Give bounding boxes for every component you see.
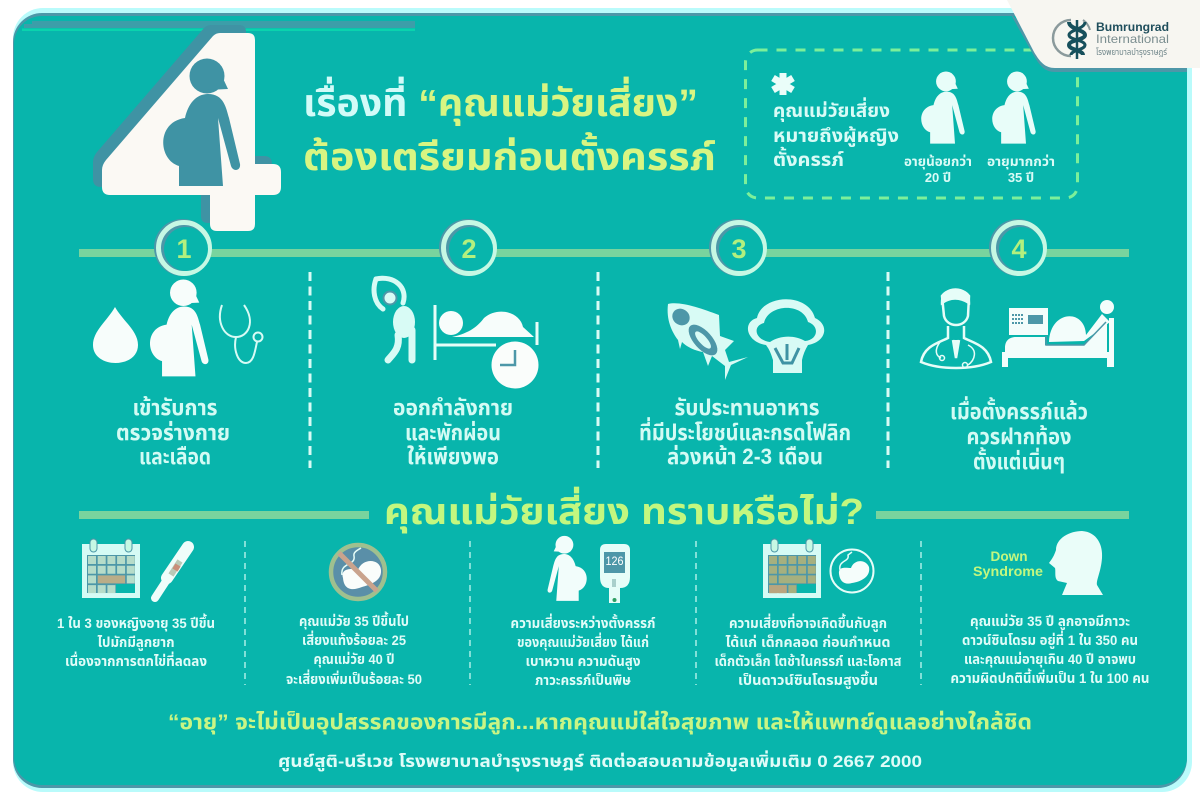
fact 5 text: ความผิดปกตินี้เพิ่มเป็น 1 ใน 100 คน — [950, 668, 1150, 686]
label: over 35: 35 ปี — [1008, 170, 1034, 185]
icon: fish — [668, 303, 748, 380]
fact 5 text: และคุณแม่อายุเกิน 40 ปี อาจพบ — [964, 651, 1136, 668]
icon: pregnant woman — [150, 279, 208, 376]
panel: fact 5 — [950, 531, 1150, 686]
fact 4 text: เป็นดาวน์ซินโดรมสูงขึ้น — [738, 670, 878, 690]
fact 1 text: ไปมักมีลูกยาก — [98, 634, 174, 652]
step 2 badge: 2 — [461, 234, 477, 264]
panel: fact 4 — [714, 539, 902, 690]
fact 3 text: ของคุณแม่วัยเสี่ยง ได้แก่ — [517, 632, 649, 651]
step 4 text: ควรฝากท้อง — [966, 424, 1072, 449]
label: under 20: 20 ปี — [925, 170, 951, 185]
icon: woman over 35 — [992, 72, 1036, 144]
title — [303, 76, 716, 179]
step 3 badge — [709, 219, 766, 276]
step 1 text — [116, 395, 230, 469]
step 2 text — [393, 395, 513, 469]
icon: broccoli — [748, 299, 824, 373]
callout: definition of at-risk mother — [746, 50, 1078, 198]
step 2 text: และพักผ่อน — [405, 420, 501, 445]
fact 2 text — [286, 611, 422, 687]
fact 2 text: เสี่ยงแท้งร้อยละ 25 — [302, 630, 406, 648]
fact 2 text: จะเสี่ยงเพิ่มเป็นร้อยละ 50 — [286, 669, 422, 687]
step 2 badge — [439, 219, 496, 276]
logo tab — [1007, 0, 1200, 72]
icon: glucose meter: 126 — [606, 554, 624, 568]
label: Down Syndrome — [973, 548, 1043, 579]
step 3 text: ล่วงหน้า 2-3 เดือน — [667, 444, 823, 469]
label: under 20 — [904, 154, 972, 185]
icon: woman under 20 — [921, 72, 965, 144]
icon: hospital bed with monitor — [1002, 300, 1114, 367]
step 3 badge: 3 — [731, 234, 747, 264]
fact 3 text: ภาวะครรภ์เป็นพิษ — [535, 672, 631, 688]
icon: glucose meter — [600, 544, 630, 603]
fact 5 text: คุณแม่วัย 35 ปี ลูกอาจมีภาวะ — [970, 613, 1130, 631]
step 2 text: ให้เพียงพอ — [407, 444, 499, 469]
fact 3 text — [510, 613, 656, 688]
icon: bed with sleeper — [435, 305, 537, 360]
label: Down Syndrome: Down — [990, 548, 1028, 564]
logo text: โรงพยาบาลบำรุงราษฎร์ — [1096, 47, 1168, 57]
icon: doctor — [921, 290, 991, 368]
panel: fact 1 — [57, 539, 215, 669]
panel: step 2 — [374, 278, 538, 469]
logo text: International — [1096, 32, 1169, 46]
timeline line — [79, 249, 1129, 257]
fact 5 text: ดาวน์ซินโดรม อยู่ที่ 1 ใน 350 คน — [962, 630, 1138, 650]
step 4 text — [950, 396, 1088, 474]
step 4 badge: 4 — [1011, 234, 1027, 264]
step 1 text: เข้ารับการ — [132, 395, 218, 420]
step 1 badge — [154, 219, 211, 276]
fact 1 text: 1 ใน 3 ของหญิงอายุ 35 ปีขึ้น — [57, 613, 215, 632]
step 1 text: และเลือด — [139, 444, 211, 469]
icon: pregnancy test — [155, 547, 188, 598]
definition text: หมายถึงผู้หญิง — [773, 125, 899, 147]
label: under 20: อายุน้อยกว่า — [904, 154, 972, 169]
logo text: Bumrungrad — [1096, 20, 1169, 34]
fact 4 text — [714, 613, 902, 690]
contact line: ศูนย์สูติ-นรีเวช โรงพยาบาลบำรุงราษฎร์ ติดต่อสอบถามข้อมูลเพิ่มเติม 0 2667 2000 — [278, 750, 922, 772]
icon: pregnant woman silhouette — [163, 58, 240, 186]
icon: logo emblem — [1053, 20, 1090, 59]
panel: fact 3 — [510, 536, 656, 688]
fact 2 text: คุณแม่วัย 35 ปีขึ้นไป — [299, 611, 409, 630]
definition text: ตั้งครรภ์ — [773, 147, 844, 171]
label: over 35 — [987, 154, 1055, 185]
logo text — [1096, 20, 1169, 57]
label: Down Syndrome: Syndrome — [973, 563, 1043, 579]
step 4 text: เมื่อตั้งครรภ์แล้ว — [950, 396, 1088, 424]
fact 5 text — [950, 613, 1150, 686]
icon: stethoscope — [220, 305, 262, 363]
icon: no-fetus symbol — [330, 544, 386, 600]
step 3 text — [639, 395, 851, 469]
icon: calendar — [763, 539, 821, 598]
icon: blood drop — [93, 307, 138, 363]
fact 1 text — [57, 613, 215, 669]
title: เรื่องที่ “คุณแม่วัยเสี่ยง” — [303, 76, 698, 126]
section heading — [79, 486, 1129, 533]
icon: stretching woman — [374, 278, 415, 360]
fact 3 text: เบาหวาน ความดันสูง — [526, 653, 640, 671]
panel: step 3 — [639, 299, 851, 469]
step 1 text: ตรวจร่างกาย — [116, 420, 230, 445]
title: ต้องเตรียมก่อนตั้งครรภ์ — [303, 131, 716, 179]
step 3 text: รับประทานอาหาร — [674, 395, 820, 420]
big number 4 with woman — [93, 25, 281, 231]
step 1 badge: 1 — [176, 234, 192, 264]
definition text — [773, 97, 899, 171]
step 4 badge — [989, 219, 1046, 276]
fact 4 text: ได้แก่ เด็กคลอด ก่อนกำหนด — [726, 634, 890, 650]
step 3 text: ที่มีประโยชน์และกรดโฟลิก — [639, 417, 851, 445]
icon: head profile — [1049, 531, 1103, 595]
icon: clock — [492, 342, 538, 388]
icon: pregnant woman — [548, 536, 587, 601]
label: over 35: อายุมากกว่า — [987, 154, 1055, 169]
step 2 text: ออกกำลังกาย — [393, 395, 513, 420]
panel: step 1 — [93, 279, 262, 469]
step 4 text: ตั้งแต่เนิ่นๆ — [973, 447, 1065, 474]
fact 1 text: เนื่องจากการตกไข่ที่ลดลง — [65, 651, 207, 669]
closing message: “อายุ” จะไม่เป็นอุปสรรคของการมีลูก...หากคุณแม่ใส่ใจสุขภาพ และให้แพทย์ดูแลอย่างใกล้ชิด — [168, 711, 1032, 735]
fact 2 text: คุณแม่วัย 40 ปี — [314, 651, 394, 668]
section heading: คุณแม่วัยเสี่ยง ทราบหรือไม่? — [384, 486, 864, 533]
panel: fact 2 — [286, 544, 422, 687]
fact 4 text: ความเสี่ยงที่อาจเกิดขึ้นกับลูก — [729, 613, 887, 633]
fact 4 text: เด็กตัวเล็ก โตช้าในครรภ์ และโอกาส — [714, 653, 902, 669]
panel: step 4 — [921, 290, 1114, 474]
icon: fetus in circle — [830, 550, 874, 592]
fact 3 text: ความเสี่ยงระหว่างตั้งครรภ์ — [510, 613, 656, 631]
icon: calendar — [82, 539, 140, 598]
definition text: คุณแม่วัยเสี่ยง — [773, 97, 890, 122]
icon: asterisk — [773, 73, 793, 95]
